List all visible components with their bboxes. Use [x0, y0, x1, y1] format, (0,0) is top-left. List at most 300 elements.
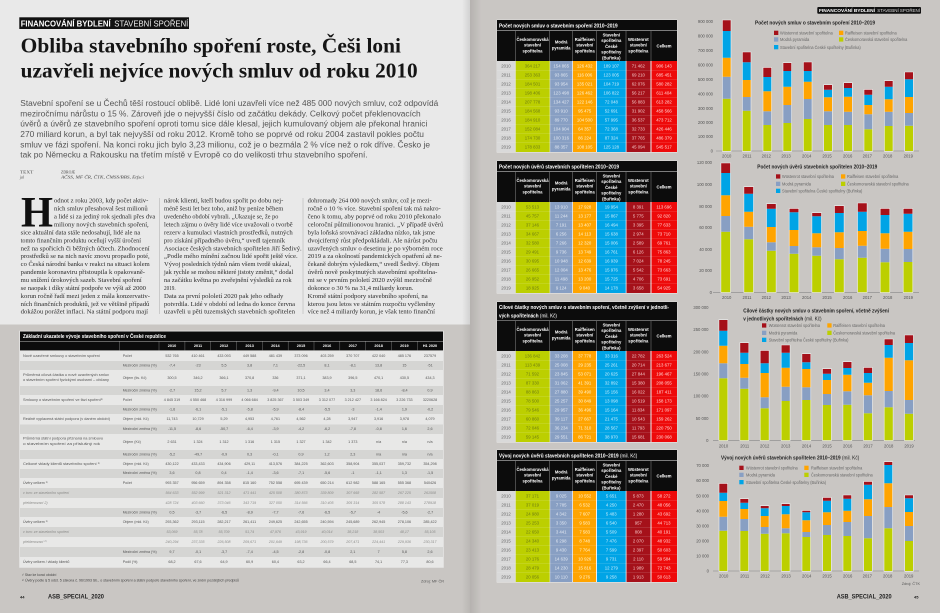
x axis labels: 2015	[822, 295, 832, 300]
title	[21, 33, 418, 82]
panel: table new loans	[497, 161, 677, 294]
table units	[123, 354, 157, 564]
body text column 3: ročně o 10 % více. Stavební spoření tak má nakro-	[308, 206, 441, 213]
table labels: překlenovací 2)	[22, 501, 48, 505]
table body: 33 208	[555, 354, 568, 359]
table values: -23	[195, 364, 201, 368]
table body: 7 476	[606, 539, 617, 544]
table body: 113 439	[525, 363, 541, 368]
table body: 906 143	[656, 64, 672, 69]
table units: Meziroční změna (%)	[123, 471, 157, 475]
table values: -1,5	[427, 471, 433, 475]
y axis labels	[696, 463, 710, 574]
y axis labels: 100 000	[697, 182, 713, 187]
y axis labels: 60 000	[699, 225, 713, 230]
table body: 88 863	[526, 390, 540, 395]
legend: Wüstenrot stavební spořitelna	[769, 323, 820, 328]
table body: 15 380	[632, 381, 645, 386]
table values: 471 441	[243, 491, 256, 495]
table values: -4	[377, 511, 380, 515]
table body: Stavební	[603, 322, 621, 328]
table body: 13 177	[578, 214, 592, 219]
table values: -2,8	[298, 550, 304, 554]
table body: 2011	[501, 73, 511, 78]
body text column 1: miliony nových stavebních spoření,	[54, 222, 149, 228]
chart title: v jednotlivých spořitelnách (mil. Kč)	[743, 316, 822, 322]
table values: 209,671	[242, 540, 256, 544]
table units: Objem (tis. Kč)	[123, 376, 146, 380]
series: Raiffeisen	[719, 483, 913, 532]
table body: spořitelna	[628, 338, 649, 343]
table values: -1,1	[375, 471, 382, 475]
legend: Českomoravská stavební spořitelna	[833, 331, 895, 336]
footnotes: ²⁾ Úvěry podle § 5 odst. 5 zákona č. 96/1993 Sb., o stavebním spoření a státní podpoře stavebního spoření, ve znění pozdějších předpisů	[22, 578, 239, 582]
table values: 198,736	[294, 540, 308, 544]
table values: -8,1	[350, 364, 356, 368]
table body: 93 954	[555, 82, 568, 87]
table values: 261,411	[243, 520, 256, 524]
page number right: 45	[914, 595, 919, 600]
table values: 1 316	[245, 440, 254, 444]
table values: 2,6	[427, 550, 433, 554]
table values: 64,9	[220, 560, 228, 564]
table body: 10 519	[632, 399, 645, 404]
body text column 1: korun ročně řadí mezi jeden z mála konzervativ-	[21, 293, 150, 300]
table values: 540426	[424, 481, 436, 485]
table body: 9 583	[579, 521, 591, 526]
table body: 100 316	[553, 136, 570, 141]
x axis labels: 2016	[843, 295, 853, 300]
table body: 4 706	[633, 277, 644, 282]
x axis labels	[722, 154, 914, 158]
table values: 396,5	[348, 376, 357, 380]
table values: 956 659	[191, 481, 205, 485]
table body: 13 476	[578, 268, 592, 273]
table body: 8 391	[633, 205, 644, 210]
table units: Objem (Kč)	[123, 440, 141, 444]
x axis labels	[719, 444, 914, 448]
table values: 8,1	[324, 364, 330, 368]
table values: 237,335	[190, 540, 204, 544]
table values: 434,906	[217, 462, 231, 466]
table values: -3,7	[195, 511, 201, 515]
table body: 54 925	[657, 286, 671, 291]
table body: stavební	[630, 333, 648, 338]
chart title: Vývoj nových úvěrů stavebních spořitelen 2010–2019 (mil. Kč)	[721, 454, 860, 462]
table body: spořitelna	[575, 48, 595, 53]
table body: 198 406	[525, 91, 541, 96]
legend: Wüstenrot stavební spořitelna	[780, 31, 833, 36]
table body: 5 775	[633, 214, 644, 219]
table values: n/a	[376, 440, 382, 444]
table body: Modrá	[555, 470, 568, 475]
table values: -5,7	[350, 511, 356, 515]
table values: 4,28	[323, 417, 331, 421]
table body: stavební	[524, 333, 542, 338]
table values: 355,037	[372, 462, 385, 466]
table body: 30 695	[526, 259, 540, 264]
footer right: ASB_SPECIAL_2020	[837, 595, 892, 601]
table labels: Úvěry celkem / vklady klientů	[23, 559, 69, 564]
body text column 2: na začátku května po zveřejnění výsledků za rok	[164, 277, 293, 284]
y axis labels: 0	[711, 148, 714, 154]
table body: 2012	[501, 82, 511, 87]
table body: Českomoravská	[516, 37, 549, 42]
table body: 5 542	[633, 268, 644, 273]
table body: spořitelna	[575, 338, 595, 343]
x axis labels: 2015	[822, 154, 832, 158]
table values: 612 982	[346, 481, 359, 485]
table body: 73 691	[657, 277, 671, 282]
table body: 1 913	[633, 575, 644, 580]
table body: 2010	[501, 354, 511, 359]
table values: 15	[402, 364, 406, 368]
table body: 613 282	[656, 100, 672, 105]
x axis labels: 2016	[843, 574, 853, 578]
x axis labels: 2018	[883, 154, 893, 158]
table body: 39 490	[578, 390, 592, 395]
table body: 36 234	[555, 426, 568, 431]
x axis labels: 2017	[863, 154, 873, 158]
table values: -8,6	[195, 427, 201, 431]
x axis labels: 2013	[781, 295, 791, 300]
table body: 7 024	[633, 259, 644, 264]
table values: -5,5	[324, 408, 330, 412]
x axis labels: 2011	[740, 574, 750, 578]
table values: 305 314	[346, 501, 359, 505]
y axis labels: 0	[710, 290, 713, 295]
series: Buřinka	[723, 31, 913, 105]
table values: 1 342	[322, 440, 332, 444]
table body: Celkem	[657, 474, 672, 479]
table heading: vých spořitelnách (mil. Kč)	[499, 313, 557, 319]
table body: 2013	[501, 521, 511, 526]
table values: 370 707	[346, 354, 359, 358]
table body: 50 613	[657, 575, 671, 580]
table body: 473 712	[656, 118, 672, 123]
table body: Celkem	[657, 334, 672, 339]
table body: 611 404	[656, 91, 672, 96]
panel: basic indicators table	[20, 331, 444, 568]
table body: spořitelna	[522, 48, 543, 53]
table values: 13,8	[375, 364, 382, 368]
table values: -1,6	[169, 408, 175, 412]
table body: 2 070	[633, 539, 644, 544]
table values: -7,1	[298, 471, 304, 475]
table body: 34 667	[526, 232, 540, 237]
table body: 189 107	[604, 64, 620, 69]
table body: 2014	[501, 530, 511, 535]
table heading	[497, 20, 677, 30]
table body: 15 681	[632, 435, 645, 440]
table values: 282,217	[217, 520, 231, 524]
x axis labels: 2011	[740, 444, 750, 448]
table body: 187 411	[656, 390, 672, 395]
table body: (Buřinka)	[602, 485, 621, 490]
table labels: Nově uzavřené smlouvy o stavebním spoření	[23, 354, 100, 358]
table values: 278918	[423, 501, 436, 505]
table body: 220 750	[656, 426, 672, 431]
table body: 11 244	[555, 214, 568, 219]
table body: 12 279	[605, 566, 618, 571]
table values: 261508	[423, 491, 436, 495]
body text column 2: rezerv a kumulaci vlastních prostředků, nutných	[164, 229, 294, 236]
body text column 3: mi se v prvním pololetí 2020 zvýšil meziročně	[308, 277, 432, 284]
body text column 2: „Podle mého mínění začnou lidé spořit ještě více.	[164, 253, 298, 260]
x axis labels: 2016	[843, 154, 853, 158]
table body: Českomoravská	[516, 178, 549, 183]
table body: 2015	[501, 250, 511, 255]
table values: 2,1	[350, 550, 355, 554]
table body: Českomoravská	[516, 327, 549, 332]
body text column 1: mu snížení úrokových sazeb. Stavební spoření	[21, 277, 142, 284]
table values: 1,6	[402, 427, 407, 431]
table body: 14 639	[555, 557, 568, 562]
y axis labels: 200 000	[693, 350, 709, 354]
table body: spořitelna	[522, 478, 543, 483]
series: Modrá pyramida	[723, 77, 913, 129]
table values: 55,709	[218, 530, 230, 534]
table body: 3 658	[633, 286, 644, 291]
legend: Modrá pyramida	[780, 37, 810, 42]
section tag left: STAVEBNÍ SPOŘENÍ	[114, 19, 189, 29]
table body: 32 733	[632, 127, 645, 132]
table values: 77,3	[401, 560, 408, 564]
table body: 12 320	[578, 241, 592, 246]
table values: 15,2	[194, 389, 202, 393]
table body: 7 583	[579, 530, 591, 535]
panel: table new contracts	[497, 20, 677, 153]
table values: -50,7	[220, 427, 228, 431]
table values: 43,919	[296, 530, 306, 534]
y axis labels: 0	[706, 438, 709, 443]
table body: 15 976	[605, 268, 618, 273]
table header years: 2019	[400, 344, 409, 348]
table body: 10 110	[555, 575, 568, 580]
table body: 1 280	[633, 512, 644, 517]
table values: 430,5	[400, 376, 409, 380]
table values: -5,9	[272, 408, 279, 412]
table values: -8,4	[298, 408, 304, 412]
table body: 2010	[501, 494, 511, 499]
y axis labels: 70 000	[696, 463, 710, 468]
title: uzavřeli nejvíce nových smluv od roku 2010	[21, 58, 418, 82]
table body: 20 176	[526, 557, 540, 562]
table body: České	[605, 44, 618, 49]
body text column 3: celoroční půlmilionovou hranici. „V případě úvěrů	[308, 222, 444, 228]
table values: -11,5	[168, 427, 176, 431]
legend: Stavební spořitelna České spořitelny (Buřinka)	[780, 45, 861, 50]
intro text: úvěrů a úvěrů ze stavebního spoření oproti tomu sice dále klesal, jejich kumulovaný objem ale překonal hranici	[20, 120, 428, 129]
table values: 425 508	[269, 491, 282, 495]
table values: 373 046	[218, 501, 230, 505]
table body: spořitelna	[575, 478, 595, 483]
table values: 1,2	[324, 453, 330, 457]
table body: 16 761	[605, 250, 618, 255]
table values: 51,74	[245, 530, 254, 534]
table header years	[20, 341, 443, 350]
table header years: 2013	[245, 344, 254, 348]
table values: -1,4	[375, 408, 382, 412]
table values: 1 327	[296, 440, 306, 444]
table body: pyramida	[552, 336, 571, 340]
y axis labels: 40 000	[699, 247, 713, 252]
table heading	[497, 302, 677, 321]
intro text	[20, 99, 439, 159]
table units: Počet	[123, 398, 132, 402]
section tag right: FINANCOVÁNÍ BYDLENÍ	[819, 6, 876, 13]
credits: jal	[19, 175, 24, 179]
table body: pyramida	[552, 476, 571, 480]
x axis labels: 2012	[760, 574, 770, 578]
table values: 226,508	[216, 540, 230, 544]
table body: 3 350	[556, 521, 567, 526]
table values: 11,743	[166, 417, 178, 421]
table body: 23 413	[526, 548, 540, 553]
table values: 5,29	[220, 417, 228, 421]
series: Modrá pyramida	[721, 216, 912, 262]
table values: 224,441	[371, 540, 385, 544]
table body: 36 537	[632, 118, 645, 123]
table body: 364 217	[525, 64, 541, 69]
table body: 4 250	[606, 503, 617, 508]
table values: -6,5	[221, 511, 227, 515]
table body: 2019	[501, 575, 511, 580]
table body: 14 113	[578, 232, 592, 237]
table body: 15 156	[605, 390, 618, 395]
table values: 3,6	[169, 471, 175, 475]
table body: spořitelna	[601, 328, 622, 333]
table body: 10 926	[578, 557, 592, 562]
table body: 134 427	[553, 100, 570, 105]
table values: 366,1	[219, 376, 229, 380]
table values: 552 999	[192, 491, 204, 495]
table units: Meziroční změna (%)	[123, 550, 157, 554]
table labels: v tom: ze stavebního spoření	[23, 491, 70, 495]
chart: contracts stacked bars	[698, 19, 919, 159]
table values: 55,105	[424, 530, 436, 534]
table values: n/a	[427, 453, 434, 457]
table body: 230 068	[656, 435, 672, 440]
x axis labels: 2013	[781, 574, 791, 578]
table values: 1 324	[193, 440, 203, 444]
table body: spořitelna	[628, 189, 649, 194]
table body	[497, 31, 677, 152]
table labels: v tom: ze stavebního spoření	[23, 530, 70, 534]
table body: 16 022	[632, 390, 645, 395]
table body: 20 714	[632, 363, 645, 368]
table body: 6 298	[556, 539, 567, 544]
table values: 521 312	[218, 491, 230, 495]
table values: 3 166 824	[370, 398, 387, 402]
table body: 14 178	[605, 286, 618, 291]
table values: 403 660	[192, 501, 204, 505]
table values: 3 825 367	[267, 398, 284, 402]
table body: 32 580	[526, 241, 540, 246]
table body: 72 743	[657, 566, 671, 571]
legend: Modrá pyramida	[746, 473, 775, 478]
table values: 245,689	[346, 520, 359, 524]
table body: 15 725	[605, 277, 618, 282]
table body: 86 721	[578, 435, 592, 440]
body text column 1	[21, 198, 155, 316]
table body: 2013	[501, 91, 511, 96]
table body: 9 040	[579, 286, 591, 291]
y axis labels	[697, 160, 713, 295]
legend: Stavební spořitelna České spořitelny (Buřinka)	[746, 480, 826, 485]
table values: 695 439	[294, 481, 308, 485]
y axis labels: 120 000	[697, 160, 713, 165]
table body: 28 567	[605, 426, 618, 431]
table values: -8,4	[401, 389, 408, 393]
table values	[164, 354, 437, 564]
table body: 2 589	[633, 241, 644, 246]
table values: 0,5	[169, 511, 175, 515]
table body: 685 451	[656, 73, 672, 78]
table labels: překlenovací ²⁾	[22, 540, 48, 544]
table body: 30 849	[578, 399, 592, 404]
table body: 11 834	[632, 408, 645, 413]
y axis labels: 80 000	[699, 204, 713, 209]
table body: České	[605, 334, 618, 339]
x axis labels: 2014	[802, 295, 812, 300]
table values: 80,6	[426, 560, 434, 564]
table body: spořitelny	[601, 480, 622, 485]
table body: 3 441	[556, 530, 567, 535]
table body: 2015	[501, 539, 511, 544]
table body: 2 470	[633, 503, 644, 508]
table body: 37 146	[526, 223, 540, 228]
table body: 13 910	[555, 205, 568, 210]
table body: 2013	[501, 232, 511, 237]
table values: -3,6	[272, 471, 279, 475]
table body: 71 592	[526, 372, 540, 377]
table body: 12 004	[555, 268, 568, 273]
y axis labels	[698, 19, 714, 154]
table body: 10 552	[578, 494, 592, 499]
footnotes: ¹⁾ Stav ke konci období	[22, 573, 56, 577]
y axis labels: 700 000	[698, 48, 714, 53]
table values: -0,1	[272, 453, 279, 457]
intro text: smluv ve fázi spoření. Na konci roku jich bylo 3,23 milionu, což je o bezmála 2 % více než o rok dříve. Česko je	[20, 140, 431, 149]
y axis labels: 300 000	[693, 305, 709, 310]
table body: 31 902	[632, 109, 645, 114]
table heading: Počet nových úvěrů stavebních spořitelen 2010–2019	[499, 164, 619, 170]
intro text: 270 miliard korun, a byl tak nejvyšší od roku 2012. Kromě toho se poprvé od roku 2004 zastavil pokles počtu	[20, 130, 424, 139]
credits: TEXT	[20, 171, 34, 175]
table body: České	[605, 185, 618, 190]
table values: -4,2	[298, 427, 304, 431]
table body: stavební	[524, 43, 542, 48]
series: Modrá pyramida	[719, 507, 913, 541]
table values: -6,5	[324, 511, 330, 515]
body text column 1: prostředků se na nich navíc znovu propadlo poté,	[21, 253, 150, 260]
series: Raiffeisen	[721, 195, 912, 249]
table body: 2016	[501, 408, 511, 413]
x axis labels: 2013	[781, 154, 791, 158]
table values: n/a	[376, 453, 382, 457]
table units: Meziroční změna (%)	[123, 427, 157, 431]
table body: 37 171	[526, 494, 540, 499]
table values: 3220628	[423, 398, 437, 402]
table body: stavební	[630, 43, 648, 48]
table body: Wüstenrot	[628, 178, 649, 183]
table body: 13 098	[605, 399, 618, 404]
table units: Počet	[123, 481, 132, 485]
table values: 3,4	[324, 389, 330, 393]
table body: 17 928	[578, 205, 592, 210]
y axis labels: 150 000	[693, 372, 709, 376]
